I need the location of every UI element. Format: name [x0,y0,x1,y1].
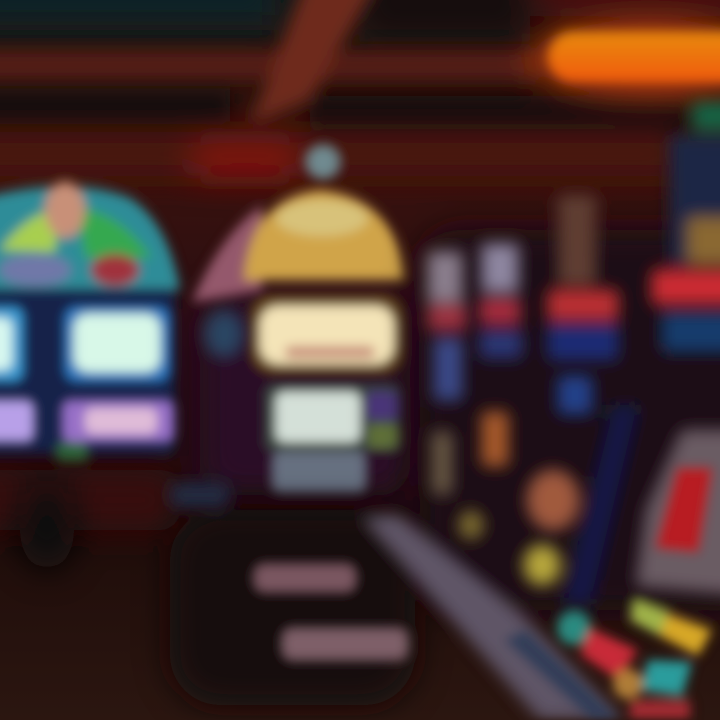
coloured buttons [557,598,712,720]
ceiling beams [0,0,720,176]
machine lower panels [0,400,174,462]
machine base [0,470,180,530]
machine screens [0,306,170,382]
machine dome [0,182,180,290]
right row of slot machines [420,102,720,610]
ceiling lamp [530,20,720,96]
left slot machine [0,182,180,570]
right machine with red panel [636,430,720,598]
stool and steps [170,482,415,705]
centre slot machine [192,145,410,495]
machine dome [192,190,404,302]
machine screen [250,294,404,374]
diagonal console [362,514,622,720]
machine lower panel [264,384,400,492]
